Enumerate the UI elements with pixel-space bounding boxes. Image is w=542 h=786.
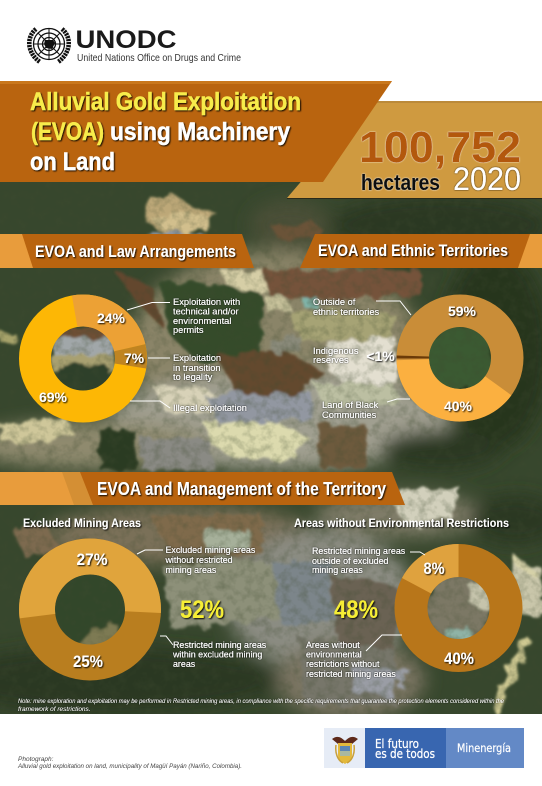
donut chart: environmental restrictions <box>394 544 523 672</box>
label: restricted within excluded: within excluded mining <box>172 650 262 660</box>
title: Alluvial Gold Exploitation <box>30 88 301 116</box>
label: technical permits: permits <box>173 325 204 335</box>
donut chart: excluded mining areas <box>31 550 149 669</box>
label: transition: Exploitation <box>173 353 221 363</box>
values: 25% <box>73 652 103 671</box>
values <box>73 550 108 671</box>
label: areas without restrictions: restricted mining areas <box>306 669 396 679</box>
background photograph: alluvial mining landscape <box>0 182 542 720</box>
label: areas without restrictions: Areas without <box>306 640 360 650</box>
panel: title banner <box>0 81 392 182</box>
leader lines <box>137 550 173 645</box>
values: 27% <box>76 550 108 569</box>
label: restricted outside excluded: mining areas <box>312 565 363 575</box>
heading: EVOA and Management of the Territory <box>0 472 405 505</box>
panel: hectares banner <box>287 101 542 199</box>
label: outside ethnic territories: ethnic territories <box>313 307 379 317</box>
heading: EVOA and Ethnic Territories: EVOA and Ethnic Territories <box>318 241 508 260</box>
leader lines <box>366 552 425 651</box>
label: black communities: Communities <box>322 410 377 420</box>
values: 7% <box>124 350 145 366</box>
label: restricted within excluded: areas <box>173 659 196 669</box>
number: 100,752: 100,752 <box>359 123 521 172</box>
label: indigenous reserves: Indigenous <box>313 346 359 356</box>
donut chart: law arrangements <box>25 301 141 416</box>
UNODC wordmark: UNODC <box>76 26 176 54</box>
photo credit: Alluvial gold exploitation on land, municipality of Magüí Payán (Nariño, Colombia). <box>17 763 242 770</box>
panel: excluded mining areas <box>23 518 267 671</box>
values <box>424 559 474 668</box>
heading: EVOA and Management of the Territory: EVOA and Management of the Territory <box>97 479 386 499</box>
slogan: El futuro <box>375 737 419 751</box>
label: black communities: Land of Black <box>322 400 379 410</box>
label: technical permits: technical and/or <box>173 306 239 316</box>
values: 8% <box>424 559 444 578</box>
ministry name: Minenergía <box>457 741 511 755</box>
label: excluded without restricted: Excluded mining areas <box>166 545 256 555</box>
photo credit: Photograph: <box>18 756 54 763</box>
donut chart: ethnic territories <box>396 294 524 422</box>
panel: areas without environmental restrictions <box>294 518 523 679</box>
label: excluded without restricted: without restricted <box>164 555 233 565</box>
values: 59% <box>448 303 477 319</box>
title: (EVOA) <box>31 118 104 146</box>
heading: EVOA and Ethnic Territories <box>300 234 542 268</box>
values: 40% <box>444 649 474 668</box>
values <box>39 310 145 405</box>
icon: coat of arms <box>332 737 358 764</box>
label: restricted outside excluded: Restricted mining areas <box>312 546 406 556</box>
label: restricted within excluded: Restricted mining areas <box>173 640 267 650</box>
label: transition: in transition <box>173 363 221 373</box>
heading: EVOA and Law Arrangements: EVOA and Law Arrangements <box>35 242 236 261</box>
label: hectares: hectares <box>361 170 440 195</box>
total: 48%: 48% <box>334 596 378 624</box>
total: 52%: 52% <box>180 596 224 624</box>
subheading: Areas without Environmental Restrictions <box>294 518 509 530</box>
label: technical permits: Exploitation with <box>173 297 240 307</box>
label: excluded without restricted: mining areas <box>166 565 217 575</box>
values: 69% <box>39 389 68 405</box>
label: restricted outside excluded: outside of excluded <box>312 556 389 566</box>
label: indigenous reserves: reserves <box>313 355 349 365</box>
label: areas without restrictions: restrictions without <box>306 659 380 669</box>
title: on Land <box>30 148 115 176</box>
label: transition: to legality <box>173 372 213 382</box>
heading: EVOA and Law Arrangements <box>0 234 254 268</box>
organisation name: United Nations Office on Drugs and Crime <box>77 52 241 64</box>
label: year 2020: 2020 <box>453 161 521 197</box>
logo: UNODC <box>29 26 241 64</box>
leader lines <box>376 301 411 402</box>
values: 40% <box>444 398 473 414</box>
icon: UN emblem <box>29 28 69 62</box>
title <box>30 88 301 176</box>
label: areas without restrictions: environmental <box>306 650 362 660</box>
photo credit <box>17 756 242 770</box>
slogan <box>375 737 435 761</box>
logo: Government of Colombia, Minenergía <box>324 728 524 768</box>
values: 24% <box>97 310 126 326</box>
title: using Machinery <box>110 118 290 146</box>
panel: law arrangements <box>25 297 247 416</box>
label: outside ethnic territories: Outside of <box>313 297 356 307</box>
panel: ethnic territories <box>313 294 524 422</box>
note <box>18 698 504 713</box>
label: illegal: Illegal exploitation <box>173 403 247 413</box>
subheading: Excluded Mining Areas <box>23 518 141 530</box>
leader lines <box>127 302 170 408</box>
label: technical permits: environmental <box>173 316 231 326</box>
values <box>366 303 477 414</box>
values: <1% <box>366 348 395 364</box>
slogan: es de todos <box>375 747 435 761</box>
note: framework of restrictions. <box>18 706 91 713</box>
